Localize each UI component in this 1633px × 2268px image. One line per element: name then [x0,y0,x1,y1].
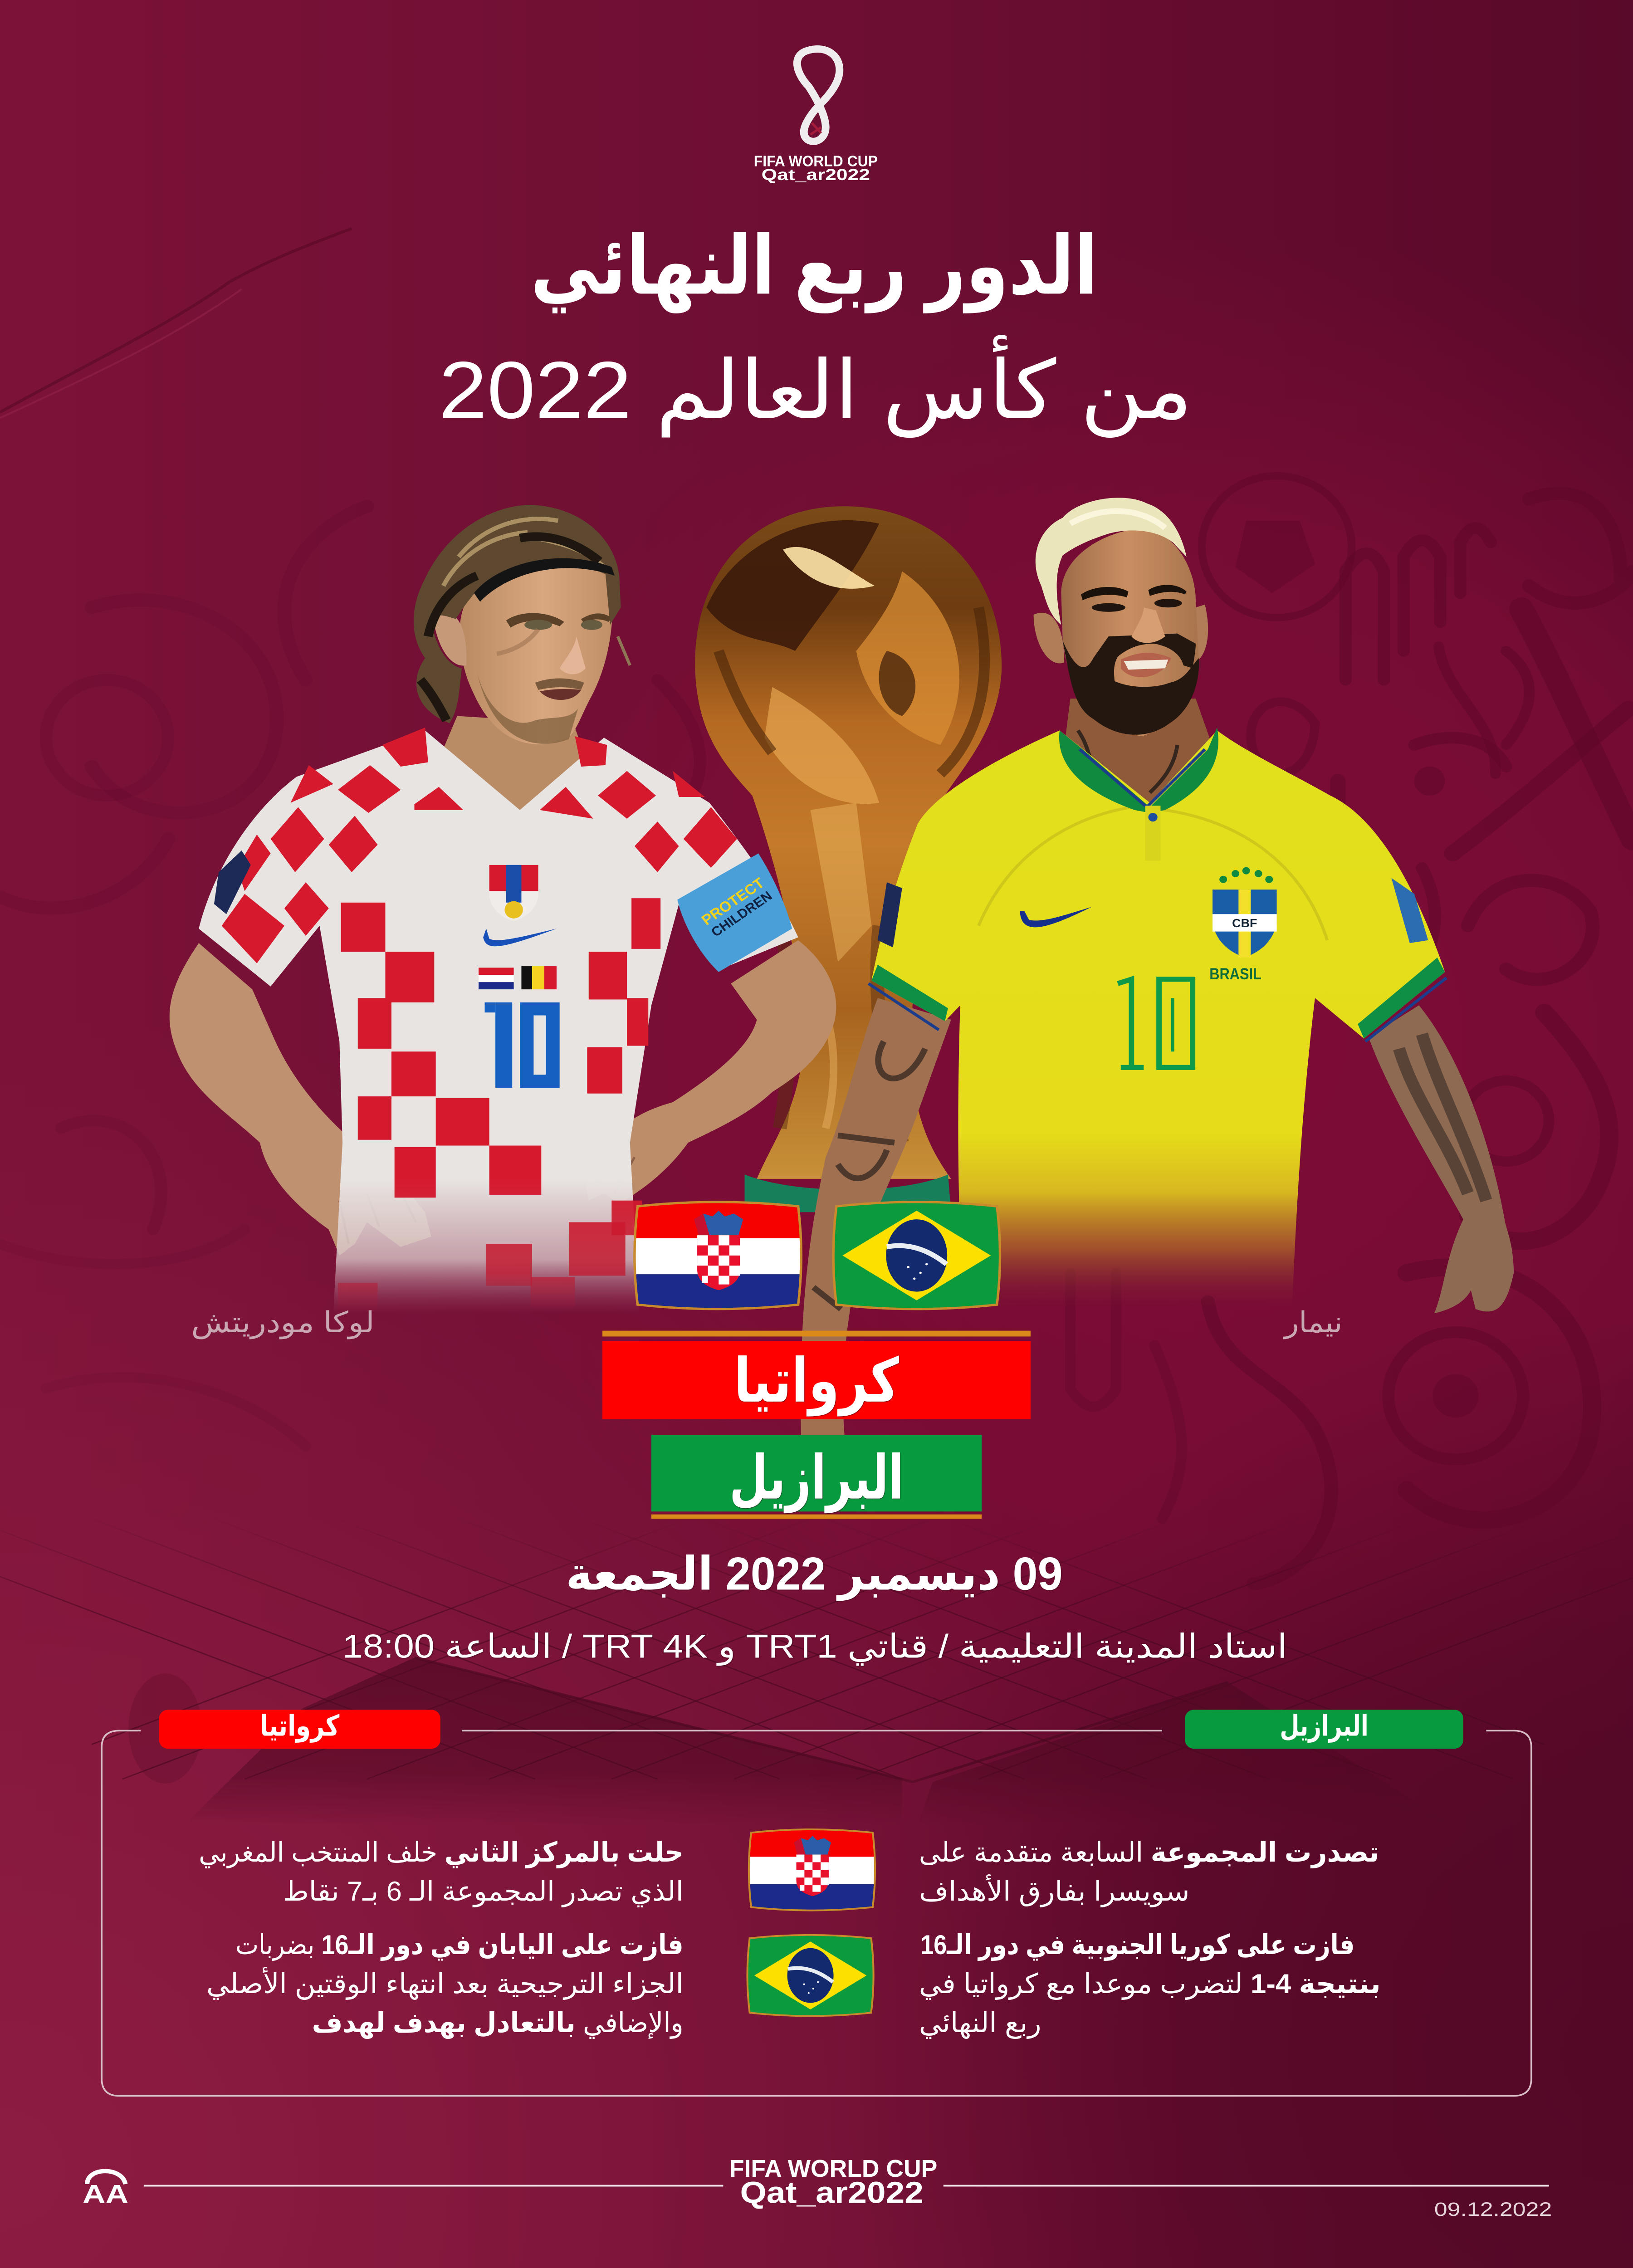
shirt checks [222,728,737,1312]
pill: Brazil [1185,1710,1463,1749]
headband [474,558,615,602]
text: Brazil summary: تصدرت المجموعة السابعة متقدمة على [919,1838,1379,1868]
text: Croatia summary: الذي تصدر المجموعة الـ 6 بـ7 نقاط [283,1877,684,1907]
pill: Croatia: كرواتيا [260,1710,340,1743]
footer [83,2155,1552,2220]
stubble [477,673,578,744]
flag: Brazil small [747,1935,874,2016]
neymar face [1061,528,1199,736]
stadium backdrop [0,1519,1633,1825]
venue and broadcast: استاد المدينة التعليمية / قناتي TRT1 و TRT 4K / الساعة 18:00 [342,1628,1287,1666]
logo: FIFA World Cup Qatar 2022: FIFA WORLD CUP [754,153,878,170]
icon: swoosh [1020,907,1092,927]
text: Croatia summary: فازت على اليابان في دور الـ16 بضربات [235,1930,684,1961]
bleached hair [1036,498,1187,625]
banner: Croatia [602,1331,1031,1419]
title: الدور ربع النهائي [531,220,1098,313]
text: Croatia summary: والإضافي بالتعادل بهدف لهدف [312,2008,684,2039]
banner: Brazil: البرازيل [729,1444,904,1514]
features [506,613,564,628]
text: Brazil summary: سويسرا بفارق الأهداف [919,1874,1189,1907]
sleeve badges [878,882,902,948]
banner: Croatia: كرواتيا [734,1347,900,1417]
footer logo text: FIFA WORLD CUP [729,2155,937,2182]
player names: لوكا مودريتش [191,1306,375,1339]
captain armband: CHILDREN [709,889,775,940]
pill: Brazil: البرازيل [1280,1710,1369,1743]
crest [489,865,538,921]
shirt number 10 [1118,979,1193,1067]
text: Brazil summary: فازت على كوريا الجنوبية في دور الـ16 [920,1930,1355,1961]
match flags on shirt [479,966,557,989]
player names: نيمار [1283,1306,1343,1339]
mouth [1121,653,1171,677]
yellow shirt [871,730,1445,1309]
banner: Brazil [651,1435,982,1519]
text: Croatia summary [199,1838,684,2039]
player: Luka Modric [170,505,836,1313]
ear [433,612,466,666]
panel: comparison [102,1710,1531,2096]
logo: FIFA World Cup Qatar 2022: Qat_ar2022 [762,166,870,184]
flag: Brazil [833,1202,1000,1309]
collar [1059,728,1218,813]
left arm [170,943,431,1256]
flag: Croatia [635,1202,801,1309]
title [439,220,1193,438]
right arm [584,940,836,1203]
CBF crest: BRASIL [1209,965,1261,983]
text: Croatia summary: الجزاء الترجيحية بعد انتهاء الوقتين الأصلي [206,1967,684,2000]
ear [1034,613,1064,663]
title: من كأس العالم 2022 [439,335,1193,438]
CBF crest [1209,867,1277,983]
hair [414,505,621,723]
neymar right arm [1369,1005,1514,1313]
icon: AA logo [83,2171,128,2209]
icon: AA logo: AA [83,2180,128,2209]
Modric face [460,566,613,744]
neymar neck [1063,699,1217,810]
match date: 09 ديسمبر 2022 الجمعة [566,1548,1063,1601]
sleeve badge [214,850,251,914]
footer logo text: Qat_ar2022 [740,2175,924,2209]
captain armband: PROTECT [698,875,768,928]
date stamp: 09.12.2022 [1434,2199,1552,2220]
neymar left arm [801,998,951,1447]
shirt number 10 [485,1002,560,1088]
shirt [199,730,798,1313]
features [1081,587,1129,600]
footer logo text [729,2155,937,2209]
text: Croatia summary: حلت بالمركز الثاني خلف المنتخب المغربي [199,1838,684,1868]
logo: FIFA World Cup Qatar 2022 [754,49,878,184]
player: Neymar [801,498,1514,1447]
icon: swoosh [483,929,557,946]
CBF crest: CBF [1232,917,1257,930]
text: Brazil summary: بنتيجة 4-1 لتضرب موعدا مع كرواتيا في [919,1969,1381,2000]
trophy [695,506,1002,1212]
pill: Croatia [159,1710,440,1749]
text: Brazil summary: ربع النهائي [919,2008,1041,2039]
captain armband [677,853,792,972]
beard [1063,634,1199,735]
flag: Croatia small [749,1829,875,1911]
text: Brazil summary [919,1838,1381,2039]
player names [191,1306,1343,1339]
neck [436,716,589,821]
icon: figure-eight emblem [797,49,840,142]
background ornament pattern [0,476,1633,1584]
